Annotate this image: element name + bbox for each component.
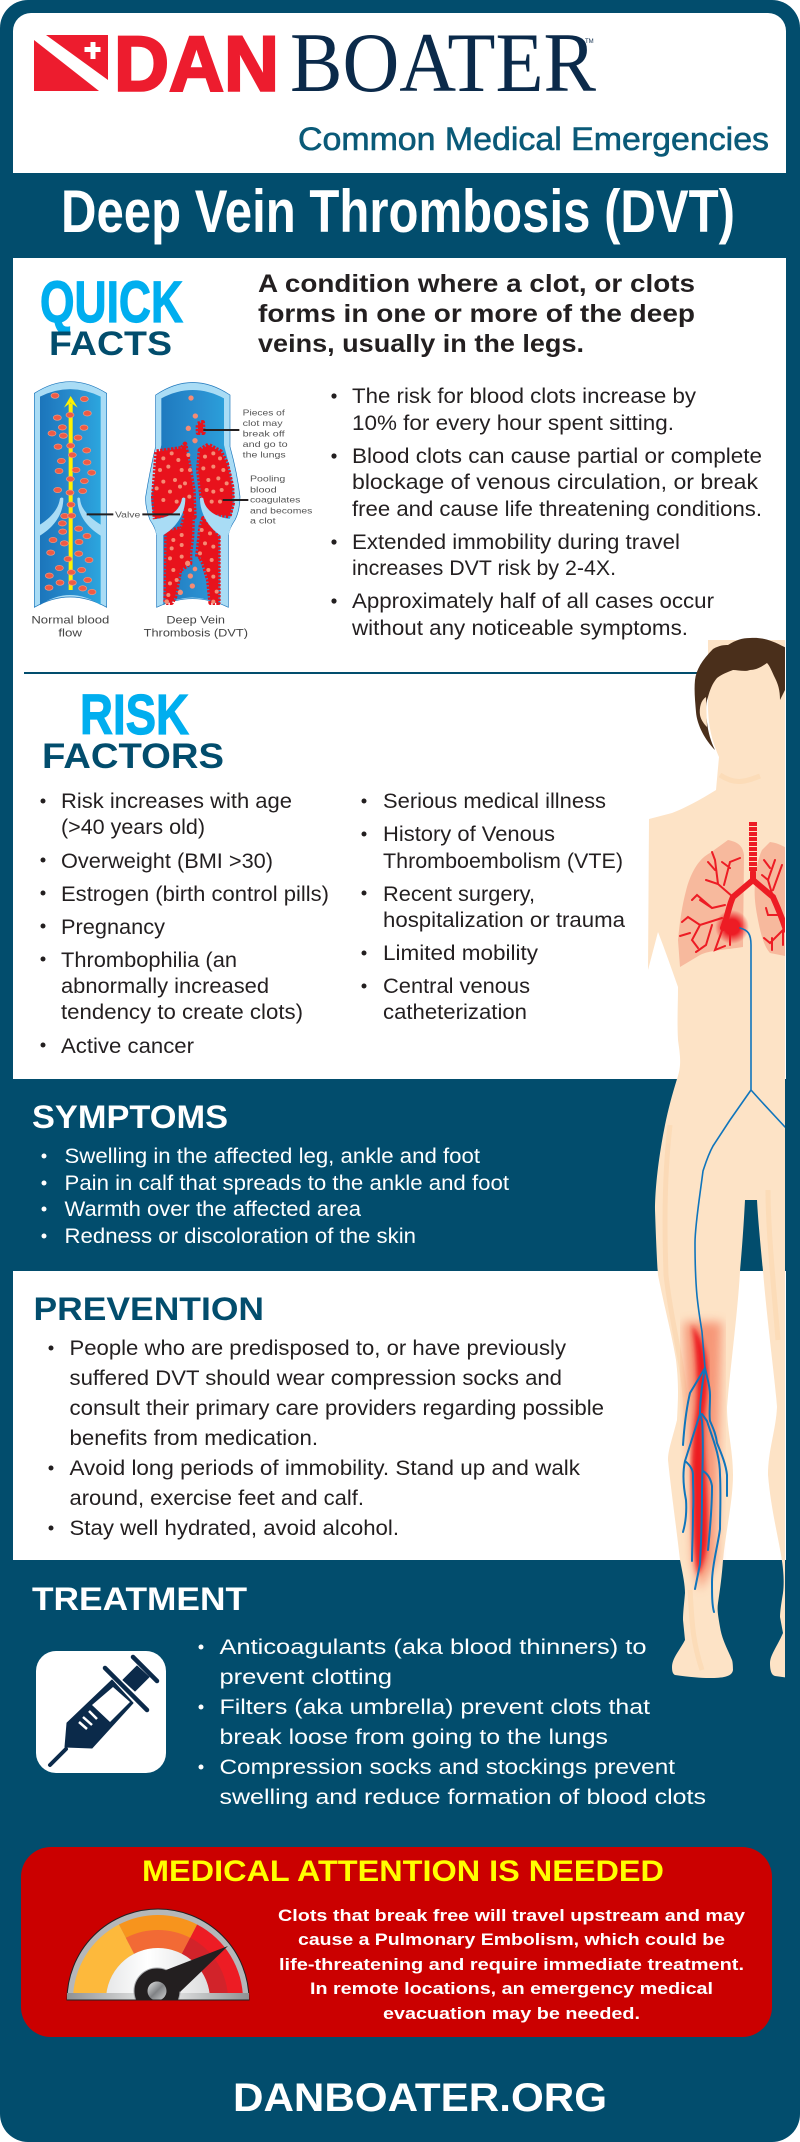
caption: normal blood flow: flow [58,628,82,640]
alert heading: MEDICAL ATTENTION IS NEEDED [142,1855,664,1888]
risk list right column: Recent surgery, [383,883,535,906]
callout lines [87,430,248,514]
heading: quick facts [40,270,183,363]
risk list right column [362,790,625,1024]
risk list right column: Limited mobility [383,942,539,965]
heading: quick facts: FACTS [49,325,172,363]
label: pooling blood: blood [250,484,277,494]
hair [695,638,790,750]
trachea and bronchi [680,822,786,952]
risk list left column: abnormally increased [61,975,269,998]
alert text: In remote locations, an emergency medical [310,1979,713,1998]
definition text: forms in one or more of the deep [258,300,695,328]
symptoms list: Pain in calf that spreads to the ankle and foot [64,1172,509,1195]
label: pooling blood: Pooling [250,474,286,484]
risk list left column: Risk increases with age [61,790,292,813]
clot glow in lung [715,910,749,944]
icon: gauge [66,1908,250,2000]
symptoms list: Warmth over the affected area [64,1198,361,1221]
panel: header [13,13,786,173]
caption: normal blood flow [31,614,109,640]
risk list left column: Pregnancy [61,916,166,939]
risk list right column: catheterization [383,1001,527,1024]
icon: syringe [36,1651,166,1773]
risk list left column: (>40 years old) [61,816,205,839]
risk list left column: Thrombophilia (an [61,949,237,972]
prevention list: around, exercise feet and calf. [70,1487,364,1510]
prevention list: suffered DVT should wear compression socks and [70,1367,562,1390]
heading: treatment: TREATMENT [32,1581,247,1617]
risk list right column: Serious medical illness [383,790,606,813]
heading: risk factors: FACTORS [42,737,224,776]
panel: prevention [34,1291,604,1540]
quick facts bullets: blockage of venous circulation, or break [352,471,759,494]
prevention list: People who are predisposed to, or have previously [70,1337,567,1360]
definition text: A condition where a clot, or clots [258,270,695,298]
symptoms list: Redness or discoloration of the skin [64,1225,416,1248]
label: pieces of clot [243,408,288,459]
alert text: cause a Pulmonary Embolism, which could be [298,1930,725,1949]
diagram: normal vein vs DVT [31,382,313,640]
lungs [678,840,790,967]
risk list left column [40,790,329,1058]
label: pieces of clot: clot may [243,418,283,428]
label: pooling blood: coagulates [250,495,301,505]
heading: symptoms: SYMPTOMS [32,1099,228,1135]
treatment list: swelling and reduce formation of blood clots [220,1786,706,1809]
label: valve: Valve [115,509,141,519]
symptoms list: Swelling in the affected leg, ankle and foot [64,1145,480,1168]
ear [700,697,707,727]
panel: risk factors [40,683,625,1058]
definition text: veins, usually in the legs. [258,330,584,358]
alert text [278,1906,746,2023]
quick facts bullets [331,385,762,640]
treatment list: prevent clotting [220,1666,392,1689]
symptoms list [42,1145,509,1248]
caption: deep vein thrombosis: Deep Vein [166,614,225,626]
heading: risk factors: RISK [80,683,189,747]
veins [683,928,785,1612]
alert text: Clots that break free will travel upstream and may [278,1906,746,1925]
prevention list: benefits from medication. [70,1427,318,1450]
logo: DAN Boater [34,16,596,110]
label: pieces of clot: break off [243,429,285,439]
body shading [665,775,778,1670]
caption: deep vein thrombosis: Thrombosis (DVT) [144,628,248,640]
quick facts bullets: free and cause life threatening conditions. [352,498,762,521]
treatment list [198,1636,706,1809]
label: pooling blood [250,474,313,526]
heading: risk factors [42,683,224,776]
label: pooling blood: and becomes [250,505,313,515]
website url: DANBOATER.ORG [233,2076,607,2120]
caption: deep vein thrombosis [144,614,248,640]
quick facts bullets: The risk for blood clots increase by [352,385,697,408]
deep vein thrombosis vein [146,382,240,607]
label: pieces of clot: and go to [243,439,288,449]
divider line [24,672,714,674]
treatment list: Compression socks and stockings prevent [220,1756,675,1779]
panel: medical attention alert [21,1847,772,2037]
logo: DAN Boater: DAN [114,20,279,108]
risk list right column: Thromboembolism (VTE) [383,850,623,873]
alert text: evacuation may be needed. [383,2004,640,2023]
prevention list: Stay well hydrated, avoid alcohol. [70,1517,399,1540]
risk list left column: tendency to create clots) [61,1001,303,1024]
quick facts bullets: increases DVT risk by 2-4X. [352,557,616,580]
treatment list: break loose from going to the lungs [220,1726,608,1749]
label: pieces of clot: Pieces of [243,408,285,418]
white panel: quick facts and risk factors background [13,258,786,1079]
treatment list: Filters (aka umbrella) prevent clots that [220,1696,650,1719]
alert text: life-threatening and require immediate treatment. [279,1955,744,1974]
risk list left column: Active cancer [61,1035,194,1058]
prevention list [48,1337,604,1540]
definition text [258,270,695,358]
normal blood flow vein [34,382,107,607]
risk list right column: History of Venous [383,823,555,846]
panel: symptoms [32,1099,509,1248]
quick facts bullets: 10% for every hour spent sitting. [352,412,674,435]
risk list right column: Central venous [383,975,530,998]
quick facts bullets: without any noticeable symptoms. [351,617,688,640]
caption: normal blood flow: Normal blood [31,614,109,626]
calf inflammation [684,1322,722,1590]
treatment list: Anticoagulants (aka blood thinners) to [220,1636,646,1659]
prevention list: consult their primary care providers regarding possible [70,1397,604,1420]
quick facts bullets: Blood clots can cause partial or complete [352,445,762,468]
risk list left column: Estrogen (birth control pills) [61,883,329,906]
panel: treatment [32,1581,706,1809]
panel: quick facts [31,270,762,640]
quick facts bullets: Approximately half of all cases occur [352,590,714,613]
heading: quick facts: QUICK [40,270,183,335]
panel: prevention background [13,1271,786,1560]
risk list left column: Overweight (BMI >30) [61,850,273,873]
quick facts bullets: Extended immobility during travel [352,531,680,554]
label: pieces of clot: the lungs [243,449,286,459]
prevention list: Avoid long periods of immobility. Stand up and walk [70,1457,581,1480]
subtitle: Common Medical Emergencies [298,121,769,157]
heading: prevention: PREVENTION [34,1291,264,1327]
body silhouette [648,640,790,1678]
figure: human body with DVT [648,638,790,1678]
risk list right column: hospitalization or trauma [383,909,625,932]
logo: DAN Boater: TM [585,39,594,45]
logo: DAN Boater: BOATER [290,16,596,110]
label: pooling blood: a clot [250,516,276,526]
